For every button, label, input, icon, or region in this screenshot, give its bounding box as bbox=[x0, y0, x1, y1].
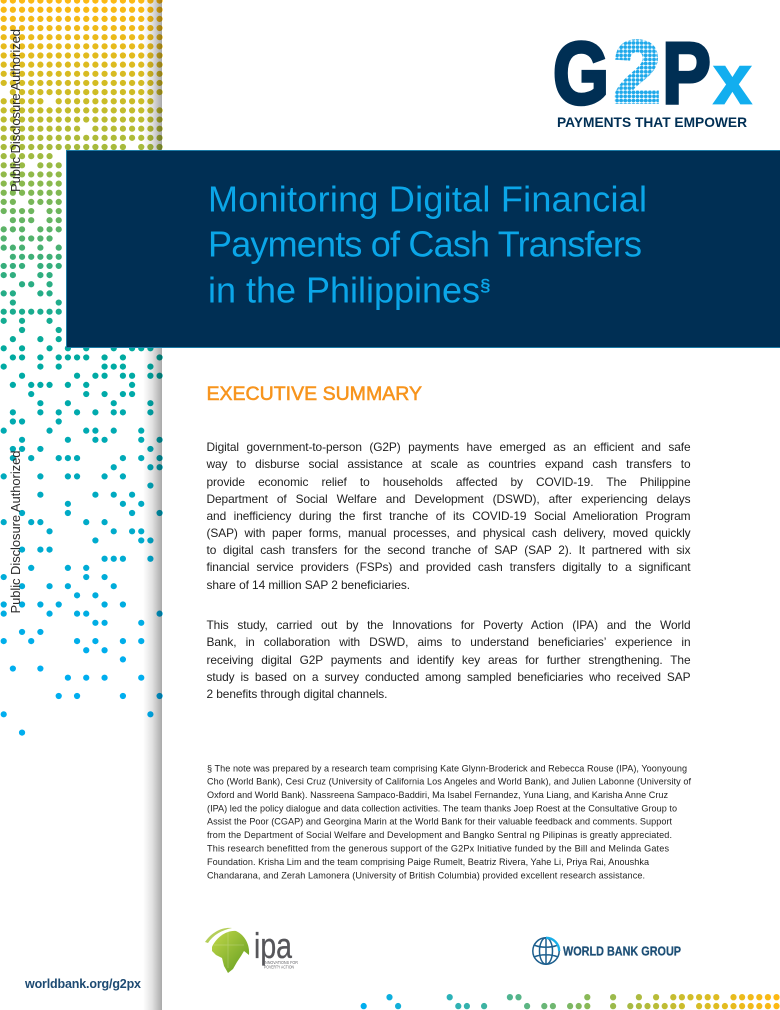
logo: G2Px bbox=[553, 24, 752, 130]
logo tagline: PAYMENTS THAT EMPOWER bbox=[557, 114, 747, 130]
title: in the Philippines bbox=[208, 270, 480, 311]
footnote: Oxford and World Bank). Nassreena Sampaco-Baddiri, Ma Isabel Fernandez, Yuna Liang, and Karisha Anne Cruz bbox=[207, 790, 668, 800]
footnote: Cho (World Bank), Cesi Cruz (University of California Los Angeles and World Bank), and Julien Labonne (University of bbox=[207, 777, 691, 787]
title: Monitoring Digital Financial bbox=[208, 179, 647, 220]
title bbox=[208, 179, 647, 311]
text block: paragraph two: 2 benefits through digital channels. bbox=[206, 687, 387, 701]
icon: World Bank globe bbox=[533, 938, 559, 964]
panel: title banner bbox=[66, 150, 780, 348]
footnote: § The note was prepared by a research team comprising Kate Glynn-Broderick and Rebecca Rouse (IPA), Yoonyoung bbox=[207, 763, 687, 773]
logo dotted numeral 2: 2 bbox=[614, 24, 660, 121]
icon: IPA globe bbox=[205, 928, 249, 973]
IPA tagline: INNOVATIONS FOR bbox=[264, 960, 299, 965]
text block: paragraph one: to digital cash transfers for the second tranche of SAP (SAP 2). It partnered with six bbox=[206, 543, 690, 557]
text block: paragraph two bbox=[206, 618, 690, 701]
logo letter P: P bbox=[662, 25, 711, 122]
text block: paragraph one: Department of Social Welfare and Development (DSWD), after experiencing delays bbox=[206, 492, 690, 506]
logotype: World Bank Group: WORLD BANK GROUP bbox=[563, 944, 681, 958]
text block: paragraph two: This study, carried out by the Innovations for Poverty Action (IPA) and the World bbox=[206, 618, 690, 632]
footnote: from the Department of Social Welfare and Development and Bangko Sentral ng Pilipinas is greatly appreciated. bbox=[207, 830, 672, 840]
dot pattern: bottom row bbox=[364, 997, 777, 1006]
watermark: Public Disclosure Authorized (bottom): Public Disclosure Authorized bbox=[8, 450, 23, 614]
footnote: Chandarana, and Zerah Lamonera (University of British Columbia) provided excellent research assistance. bbox=[207, 870, 645, 880]
website link: worldbank.org/g2px bbox=[24, 977, 141, 991]
text block: paragraph one: financial service providers (FSPs) and provided cash transfers digitally to a significant bbox=[206, 560, 690, 574]
dot pattern: left column bbox=[4, 1, 161, 733]
text block: paragraph one: way to disburse social assistance at scale as countries expand cash transfers to bbox=[206, 457, 690, 471]
heading: executive summary: EXECUTIVE SUMMARY bbox=[206, 383, 422, 405]
text block: paragraph one: provide economic relief to households affected by COVID-19. The Philippine bbox=[206, 474, 690, 488]
footnote: (IPA) led the policy dialogue and data collection activities. The team thanks Joep Roest at the Consultative Group to bbox=[207, 803, 677, 813]
footnote: Foundation. Krisha Lim and the team comprising Paige Rumelt, Beatriz Rivera, Yahe Li, Priya Rai, Anoushka bbox=[207, 857, 650, 867]
title: Payments of Cash Transfers bbox=[208, 224, 642, 265]
logotype: ipa: ipa bbox=[254, 925, 293, 966]
text block: paragraph two: study is based on a survey conducted among sampled beneficiaries who received SAP bbox=[206, 670, 690, 684]
text block: paragraph two: receiving digital G2P payments and identify key areas for further strengthening. The bbox=[206, 652, 690, 666]
footnote: Assist the Poor (CGAP) and Georgina Marin at the World Bank for their valuable feedback and comments. Support bbox=[207, 817, 672, 827]
watermark: Public Disclosure Authorized (top): Public Disclosure Authorized bbox=[8, 29, 23, 192]
title: § bbox=[480, 276, 490, 295]
IPA tagline bbox=[264, 960, 299, 970]
IPA tagline: POVERTY ACTION bbox=[264, 964, 294, 970]
text block: paragraph one bbox=[206, 440, 690, 592]
text block: paragraph one: share of 14 million SAP 2 beneficiaries. bbox=[206, 578, 410, 592]
footnote bbox=[207, 763, 691, 880]
logo: World Bank Group bbox=[533, 938, 681, 964]
logo letter x: x bbox=[714, 40, 752, 118]
text block: paragraph one: Digital government-to-person (G2P) payments have emerged as an efficient and safe bbox=[206, 440, 690, 454]
logo letter G: G bbox=[553, 24, 609, 122]
text block: paragraph one: and inefficiency during the first tranche of its COVID-19 Social Amelioration Program bbox=[206, 509, 690, 523]
page fold shadow bbox=[143, 0, 162, 1010]
footnote: This research benefitted from the generous support of the G2Px Initiative funded by the Bill and Melinda Gates bbox=[207, 844, 669, 854]
text block: paragraph one: (SAP) with paper forms, manual processes, and physical cash delivery, moved quickly bbox=[206, 526, 690, 540]
logo: IPA bbox=[205, 925, 299, 973]
text block: paragraph two: Bank, in collaboration with DSWD, aims to understand beneficiaries’ experience in bbox=[206, 635, 690, 649]
